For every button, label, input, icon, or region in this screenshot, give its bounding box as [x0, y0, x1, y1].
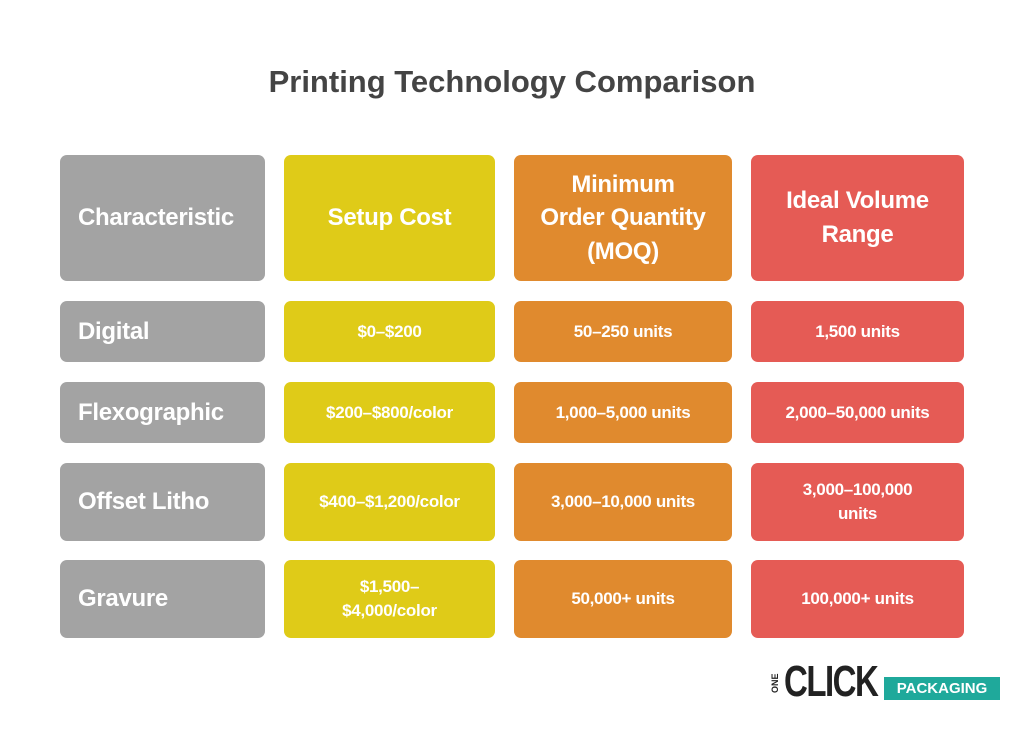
text: 1,500 units	[815, 322, 900, 341]
header: ideal volume	[751, 155, 964, 281]
text: $400–$1,200/color	[319, 492, 460, 511]
text: 50–250 units	[574, 322, 672, 341]
row: digital	[60, 301, 265, 362]
row: digital: Digital	[78, 318, 149, 345]
logo: PACKAGING	[897, 680, 987, 697]
text: 50,000+ units	[571, 589, 675, 608]
header: ideal volume: Range	[822, 221, 893, 248]
header: setup cost: Setup Cost	[328, 204, 451, 231]
logo: CLICK	[784, 657, 877, 706]
header: MOQ: Order Quantity	[540, 204, 706, 231]
header: setup cost	[284, 155, 495, 281]
row: offset litho	[60, 463, 265, 541]
title: Printing Technology Comparison	[269, 64, 755, 99]
header: characteristic	[60, 155, 265, 281]
text: 1,000–5,000 units	[556, 403, 690, 422]
text: 2,000–50,000 units	[786, 403, 929, 422]
row: offset litho: Offset Litho	[78, 488, 209, 515]
logo: ONE	[770, 673, 780, 693]
row: gravure: Gravure	[78, 585, 168, 612]
header: MOQ: Minimum	[571, 171, 675, 198]
text: $200–$800/color	[326, 403, 453, 422]
header: characteristic: Characteristic	[78, 204, 234, 231]
header: MOQ	[514, 155, 732, 281]
header: MOQ: (MOQ)	[587, 238, 659, 265]
row: gravure	[60, 560, 265, 638]
text: 3,000–100,000	[803, 480, 912, 499]
logo	[770, 657, 1000, 706]
text: $1,500–	[360, 577, 419, 596]
header: ideal volume: Ideal Volume	[786, 187, 929, 214]
row: flexographic: Flexographic	[78, 399, 224, 426]
text: $0–$200	[357, 322, 422, 341]
text: 3,000–10,000 units	[551, 492, 695, 511]
text: 100,000+ units	[801, 589, 914, 608]
text: $4,000/color	[342, 601, 437, 620]
text: units	[838, 504, 877, 523]
row: flexographic	[60, 382, 265, 443]
